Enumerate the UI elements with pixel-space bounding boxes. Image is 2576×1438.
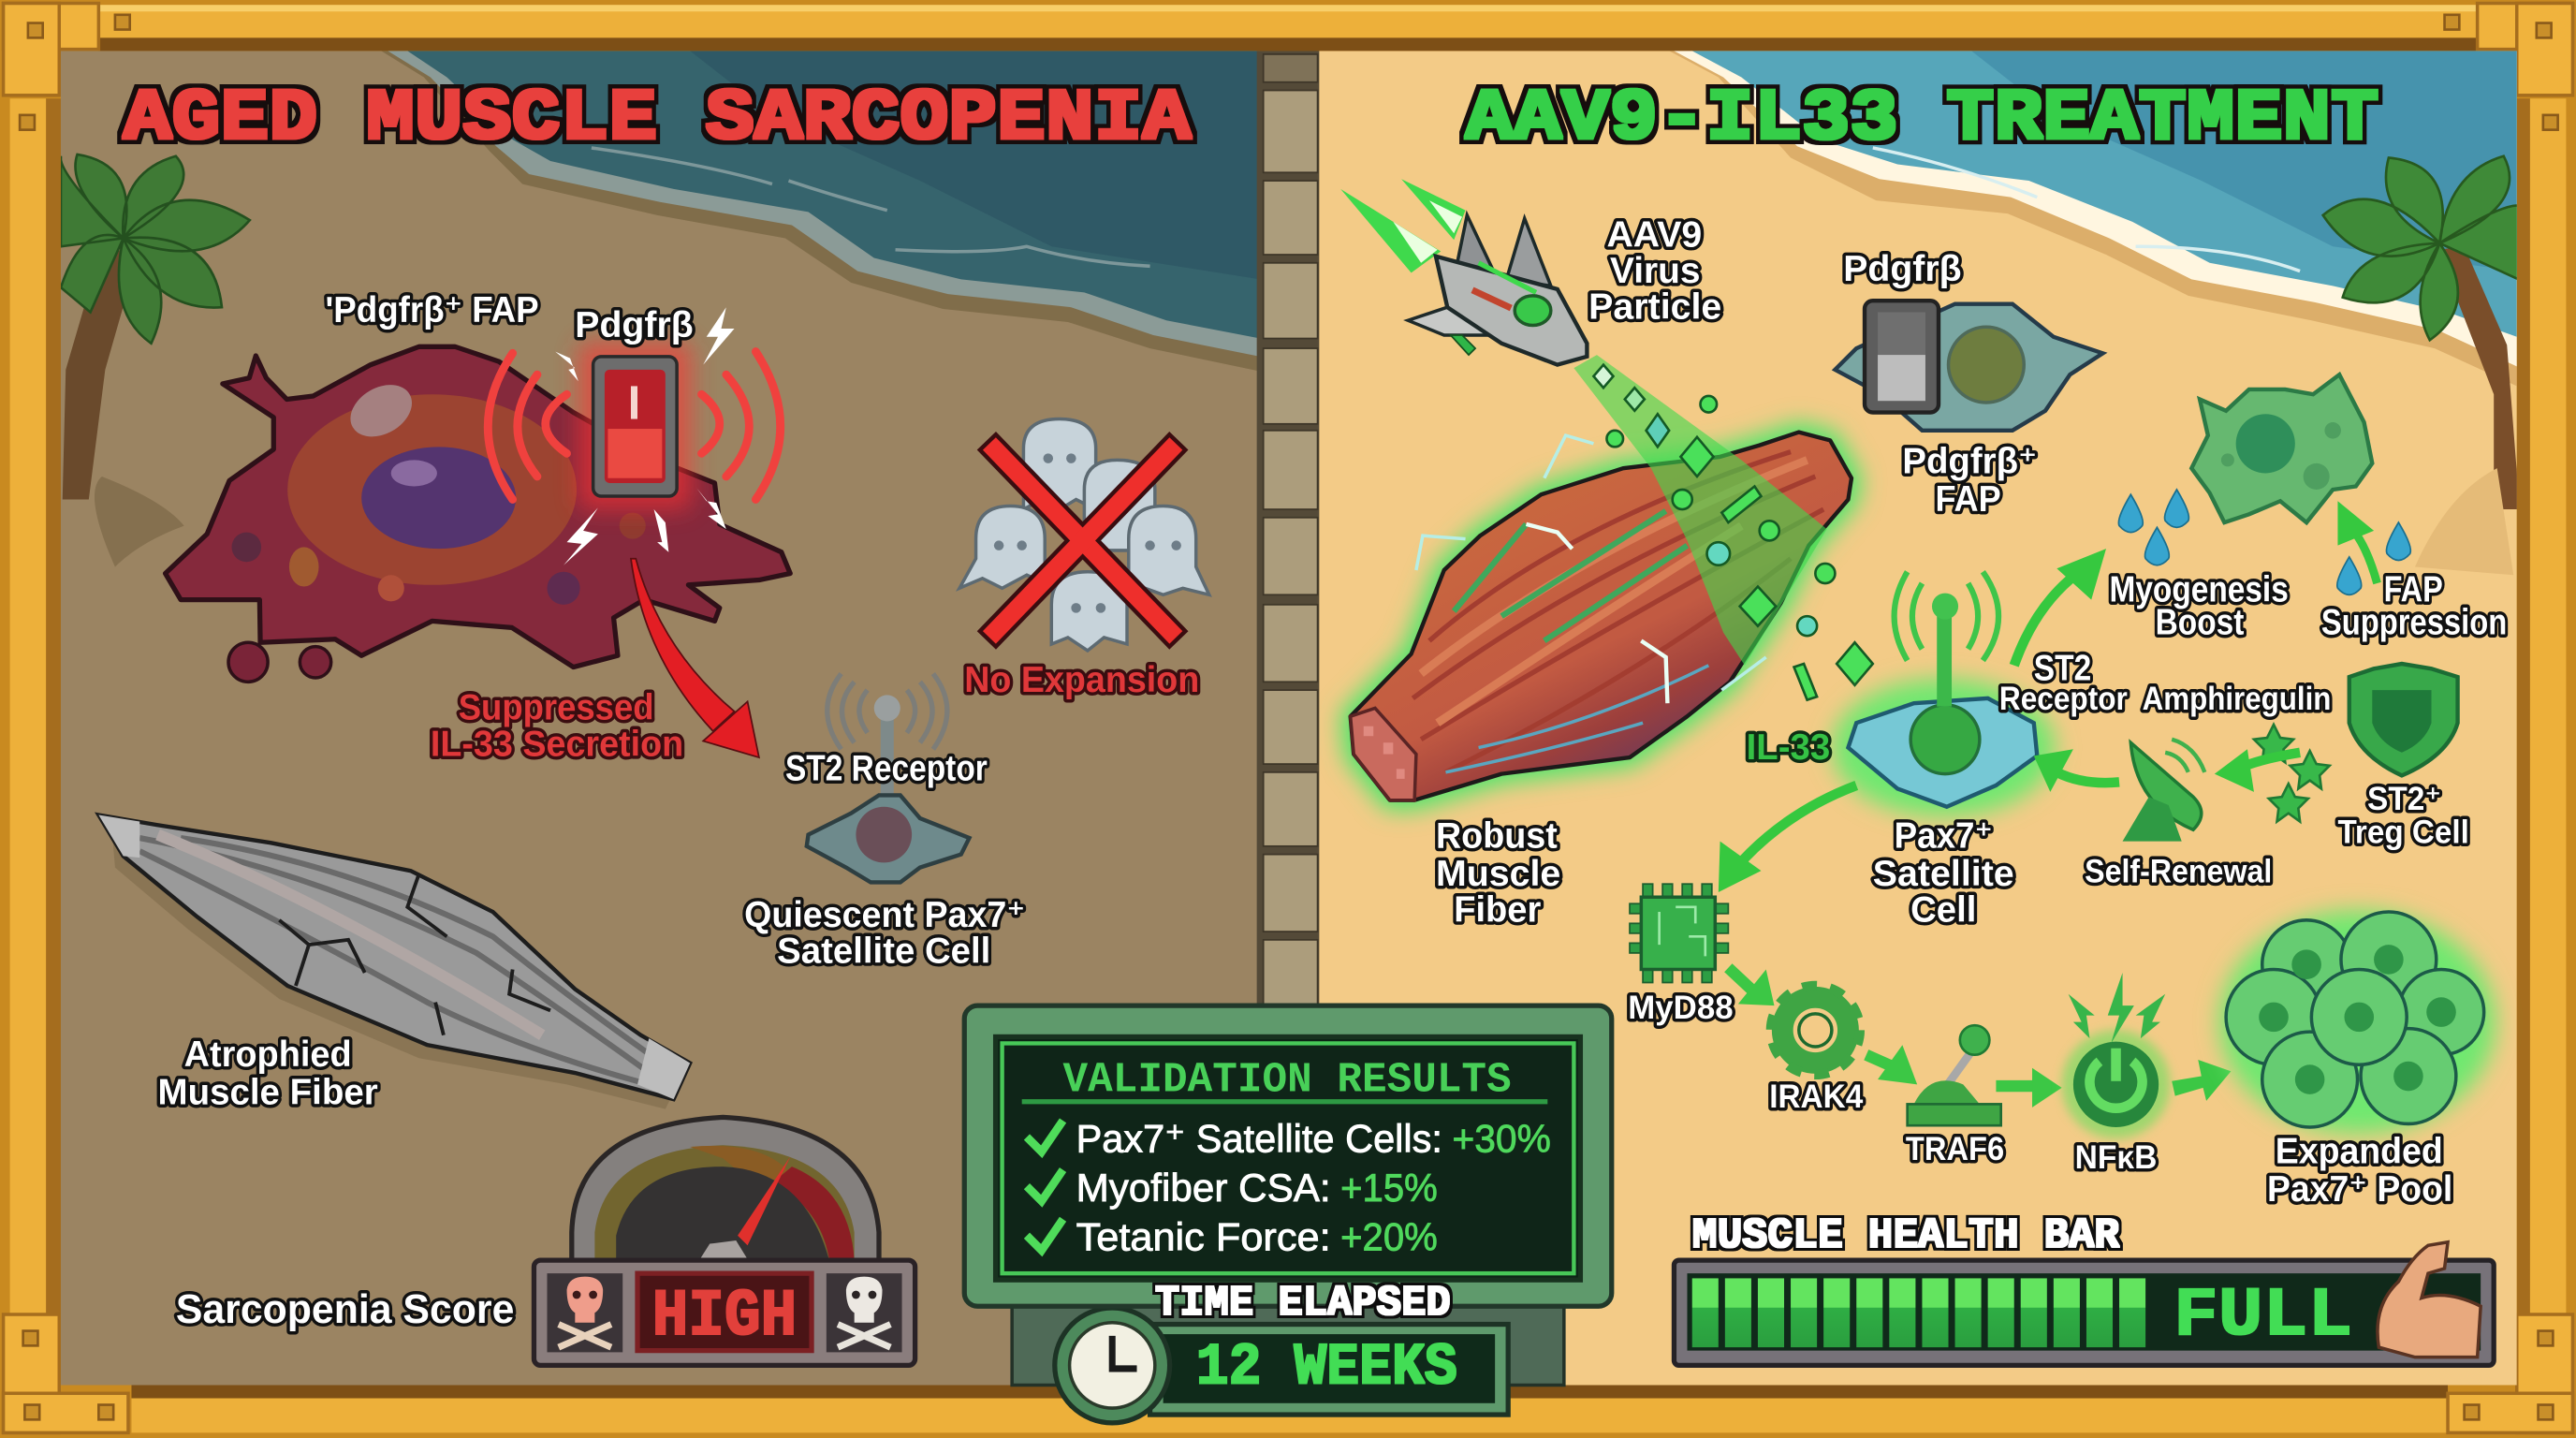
- label: suppressed IL-33 secretion: [431, 688, 683, 764]
- icon: robust muscle fiber: [1351, 433, 1852, 800]
- label: FAP suppression: FAP: [2384, 569, 2443, 609]
- arrow: TRAF6 to NFκB: [1996, 1068, 2062, 1108]
- label: self-renewal: Self-Renewal: [2085, 853, 2272, 889]
- label: AAV9 virus particle: Particle: [1588, 286, 1721, 327]
- label: Pax7 satellite cell: Cell: [1910, 890, 1976, 931]
- icon: water droplets: [2118, 490, 2410, 594]
- result: myofiber CSA: +15%: [1340, 1166, 1438, 1210]
- result: satellite cells: Pax7⁺ Satellite Cells:: [1076, 1116, 1442, 1160]
- label: suppressed IL-33 secretion: IL-33 Secretion: [431, 724, 683, 764]
- icon: expanded Pax7 pool: [2219, 910, 2496, 1134]
- panel: right treatment beach: [1316, 51, 2519, 1385]
- arrow: to myogenesis: [2014, 549, 2106, 666]
- palm tree left: [61, 154, 250, 566]
- icon: FAP with off switch: [1835, 301, 2102, 431]
- label: ST2 receptor left: ST2 Receptor: [785, 749, 988, 789]
- label: Pdgfrβ+ FAP right: FAP: [1935, 479, 2001, 520]
- panel: aged muscle sarcopenia: [61, 51, 1260, 1385]
- stone wall divider: [1257, 51, 1319, 1020]
- label: ST2 Treg cell: Treg Cell: [2337, 814, 2469, 850]
- arrow: NFκB to pool: [2172, 1060, 2231, 1101]
- result: myofiber CSA: [1027, 1166, 1438, 1210]
- label: quiescent satellite cell: [744, 895, 1025, 971]
- left beach background: [61, 51, 1260, 1385]
- label: ST2 receptor right: ST2: [2034, 649, 2091, 689]
- label: time elapsed: TIME ELAPSED: [1155, 1279, 1451, 1328]
- icon: atrophied muscle fiber: [98, 814, 690, 1109]
- label: muscle health bar: MUSCLE HEALTH BAR: [1692, 1211, 2120, 1260]
- arrow: MyD88 to IRAK4: [1728, 968, 1774, 1005]
- label: ST2 Treg cell: ST2⁺: [2367, 781, 2441, 817]
- label: AAV9 virus particle: [1588, 214, 1721, 327]
- icon: TRAF6 lever: [1908, 1025, 2001, 1125]
- icon: satellite dish: [2123, 740, 2204, 842]
- label: quiescent satellite cell: Satellite Cell: [777, 931, 990, 971]
- arrow: Treg to dish: [2215, 749, 2300, 792]
- label: ST2 receptor right: Receptor: [1999, 681, 2128, 717]
- arrow: suppressed signal: [631, 559, 759, 757]
- arrow: dish to Pax7: [2034, 749, 2119, 792]
- value: 12 weeks: 12 WEEKS: [1196, 1334, 1457, 1401]
- result: myofiber CSA: Myofiber CSA:: [1076, 1166, 1331, 1210]
- label: ST2 Treg cell: [2337, 781, 2469, 850]
- label: robust muscle fiber: Robust: [1436, 816, 1558, 857]
- title: AAV9-IL33 treatment: AAV9-IL33 TREATMENT: [1466, 79, 2378, 160]
- label: MyD88: MyD88: [1628, 990, 1734, 1026]
- label: Pdgfrβ: Pdgfrβ: [575, 305, 694, 345]
- icon: skull white: [838, 1277, 890, 1347]
- label: robust muscle fiber: Fiber: [1454, 890, 1541, 931]
- icon: damaged FAP cell: [166, 346, 790, 682]
- label: Pax7 satellite cell: [1873, 816, 2014, 931]
- icon: MyD88 chip: [1630, 884, 1728, 983]
- label: atrophied muscle fiber: Atrophied: [184, 1034, 352, 1075]
- icon: AAV9 ship with green beam: [1340, 179, 1873, 700]
- label: Pdgfrβ FAP: 'Pdgfrβ⁺ FAP: [326, 290, 539, 330]
- icon: quiescent satellite cell with ST2 receptor: [807, 674, 970, 882]
- value: full: FULL: [2174, 1278, 2352, 1356]
- icon: ghost cells crossed out: [959, 419, 1209, 651]
- result: tetanic force: Tetanic Force:: [1076, 1215, 1331, 1259]
- arrow: to FAP suppression: [2337, 501, 2378, 583]
- label: FAP suppression: [2321, 569, 2507, 642]
- label: Pdgfrβ+ FAP right: [1902, 441, 2037, 520]
- label: myogenesis boost: Myogenesis: [2110, 569, 2289, 609]
- result: tetanic force: [1027, 1215, 1438, 1259]
- label: atrophied muscle fiber: Muscle Fiber: [158, 1072, 378, 1112]
- panel: high score plate: [534, 1260, 915, 1365]
- label: sarcopenia score: Sarcopenia Score: [176, 1286, 514, 1332]
- label: ST2 receptor right: [1999, 649, 2128, 717]
- arrow: IRAK4 to TRAF6: [1866, 1045, 1917, 1084]
- label: AAV9 virus particle: Virus: [1610, 251, 1701, 291]
- result: tetanic force: +20%: [1340, 1215, 1438, 1259]
- right beach background: [1316, 51, 2517, 1385]
- label: Pdgfrβ right: Pdgfrβ: [1843, 249, 1962, 289]
- label: FAP suppression: Suppression: [2321, 602, 2507, 642]
- label: myogenesis boost: Boost: [2156, 602, 2245, 642]
- icon: ST2 Treg shield: [2349, 664, 2458, 775]
- value: HIGH: HIGH: [652, 1281, 797, 1355]
- arrow: Pax7 to MyD88: [1719, 785, 1856, 892]
- icon: clock: [1055, 1308, 1170, 1423]
- bar segments: [1692, 1278, 2145, 1347]
- label: expanded Pax7 pool: Pax7⁺ Pool: [2267, 1169, 2452, 1210]
- icon: skull pink: [559, 1277, 611, 1347]
- label: atrophied muscle fiber: [158, 1034, 378, 1112]
- label: robust muscle fiber: Muscle: [1436, 854, 1560, 894]
- label: Pdgfrβ+ FAP right: Pdgfrβ⁺: [1902, 441, 2037, 481]
- panel: time elapsed: [1012, 1298, 1564, 1423]
- label: AAV9 virus particle: AAV9: [1606, 214, 1702, 255]
- icon: IRAK4 gear: [1771, 986, 1860, 1075]
- label: TRAF6: TRAF6: [1906, 1131, 2004, 1167]
- icon: Pax7 satellite cell with ST2 antenna: [1832, 572, 2056, 816]
- icon: NFκB power button with bolts: [2062, 973, 2170, 1138]
- label: IRAK4: IRAK4: [1769, 1078, 1864, 1115]
- label: expanded Pax7 pool: [2267, 1132, 2452, 1210]
- label: robust muscle fiber: [1436, 816, 1560, 931]
- palm tree right: [2323, 156, 2519, 575]
- label: no expansion: No Expansion: [964, 660, 1199, 700]
- gauge: sarcopenia score: [572, 1117, 879, 1262]
- label: quiescent satellite cell: Quiescent Pax7⁺: [744, 895, 1025, 935]
- label: NFκB: NFκB: [2075, 1139, 2157, 1176]
- panel: muscle health bar: [1674, 1242, 2494, 1365]
- label: amphiregulin: Amphiregulin: [2143, 681, 2331, 717]
- icon: amphiregulin stars: [2254, 725, 2330, 822]
- icon: suppressed green FAP: [2191, 374, 2372, 522]
- panel: validation results: [964, 1005, 1612, 1306]
- label: expanded Pax7 pool: Expanded: [2276, 1132, 2443, 1172]
- label: myogenesis boost: [2110, 569, 2289, 642]
- title: aged muscle sarcopenia: AGED MUSCLE SARCOPENIA: [124, 79, 1192, 160]
- heading: validation results: VALIDATION RESULTS: [1063, 1055, 1512, 1104]
- label: Pax7 satellite cell: Pax7⁺: [1895, 816, 1993, 857]
- result: satellite cells: +30%: [1453, 1116, 1551, 1160]
- label: Pax7 satellite cell: Satellite: [1873, 854, 2014, 894]
- icon: flexed arm: [2378, 1242, 2481, 1357]
- label: IL-33: IL-33: [1747, 727, 1830, 768]
- label: suppressed IL-33 secretion: Suppressed: [459, 688, 654, 728]
- icon: overactive Pdgfrβ switch: [488, 307, 781, 565]
